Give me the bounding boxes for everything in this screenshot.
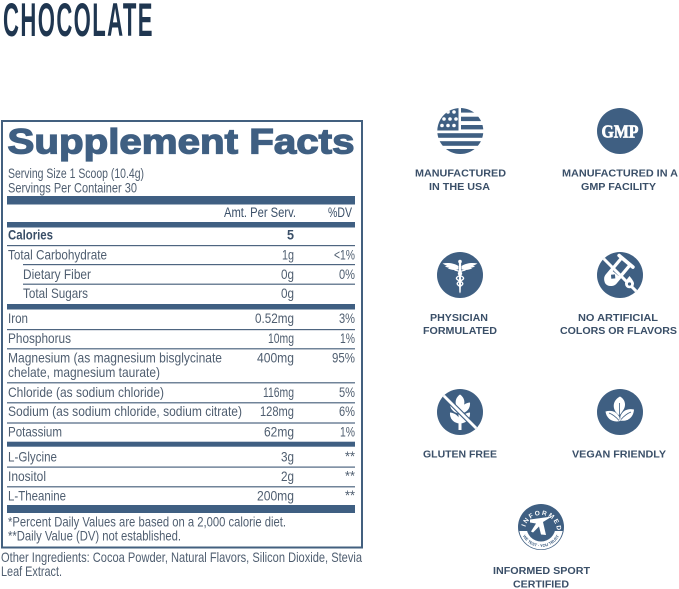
other ingredients: Other Ingredients: Cocoa Powder, Natural Flavors, Silicon Dioxide, Stevia	[1, 549, 362, 565]
row: potassium: 1%	[340, 424, 355, 440]
row: l-glycine	[8, 448, 355, 465]
row: phosphorus: 10mg	[268, 330, 294, 346]
column headers	[224, 205, 352, 220]
row: l-glycine: **	[345, 448, 355, 464]
badge: physician formulated	[423, 252, 497, 337]
footnotes: **Daily Value (DV) not established.	[8, 528, 181, 544]
label: INFORMED SPORT	[493, 565, 591, 577]
label	[415, 168, 506, 193]
row: total carbohydrate: <1%	[334, 246, 355, 262]
label: COLORS OR FLAVORS	[560, 325, 677, 337]
icon: american flag	[437, 108, 485, 154]
row: potassium: 62mg	[264, 424, 294, 440]
badge: gmp facility	[562, 108, 678, 193]
row: l-theanine	[8, 487, 355, 504]
serving information: Serving Size 1 Scoop (10.4g)	[8, 165, 144, 181]
icon: crossed test tube	[597, 252, 643, 298]
row: l-glycine: L-Glycine	[8, 449, 57, 465]
row: magnesium: Magnesium (as magnesium bisglycinate	[8, 350, 222, 366]
badge: manufactured in the usa	[415, 108, 506, 193]
label: PHYSICIAN	[430, 312, 488, 324]
row: total carbohydrate	[8, 246, 355, 262]
label: GMP FACILITY	[581, 181, 656, 193]
row: chloride: Chloride (as sodium chloride)	[8, 384, 164, 400]
row: l-theanine: L-Theanine	[8, 488, 66, 504]
divider bar	[7, 196, 355, 204]
row: phosphorus: Phosphorus	[8, 330, 71, 346]
row: inositol: Inositol	[8, 468, 46, 484]
divider bar	[7, 442, 355, 447]
row: inositol: 2g	[281, 468, 294, 484]
row: dietary fiber: Dietary Fiber	[23, 266, 91, 282]
row: l-theanine: **	[345, 487, 355, 503]
row: sodium: 6%	[339, 403, 355, 419]
row: iron	[8, 310, 355, 326]
other ingredients: Leaf Extract.	[1, 563, 62, 579]
label	[493, 565, 591, 589]
row: iron: 3%	[339, 310, 355, 326]
label: MANUFACTURED	[415, 168, 506, 180]
label: NO ARTIFICIAL	[578, 312, 659, 324]
label: VEGAN FRIENDLY	[572, 449, 666, 461]
serving information: Servings Per Container 30	[8, 180, 137, 196]
row: total carbohydrate: 1g	[282, 246, 294, 262]
icon: gmp: GMP	[602, 122, 638, 142]
row: iron: Iron	[8, 310, 28, 326]
label: IN THE USA	[429, 181, 490, 193]
row: dietary fiber: 0g	[281, 266, 294, 282]
column headers: %DV	[328, 205, 352, 220]
label	[562, 168, 678, 193]
badge: vegan friendly	[572, 389, 666, 461]
label: GLUTEN FREE	[423, 449, 497, 461]
row: chloride: 5%	[339, 384, 355, 400]
row: phosphorus	[8, 330, 355, 346]
footnotes	[8, 514, 286, 544]
row: magnesium	[8, 350, 355, 380]
row: l-theanine: 200mg	[257, 488, 294, 504]
other ingredients	[1, 549, 362, 579]
row: inositol	[8, 468, 355, 484]
row: chloride: 116mg	[263, 384, 294, 400]
column headers: Amt. Per Serv.	[224, 205, 296, 220]
row: magnesium: chelate, magnesium taurate)	[8, 364, 160, 380]
serving information	[8, 165, 144, 196]
badge: informed sport certified	[493, 504, 591, 589]
divider bar	[7, 505, 355, 513]
icon: informed seal	[518, 504, 564, 550]
row: sodium: Sodium (as sodium chloride, sodium citrate)	[8, 403, 242, 419]
label	[560, 312, 677, 337]
row: iron: 0.52mg	[255, 310, 294, 326]
icon: crossed wheat	[437, 389, 483, 435]
row: dietary fiber	[23, 266, 355, 282]
row: l-glycine: 3g	[281, 449, 294, 465]
icon: informed seal: WE TEST · YOU TRUST	[523, 534, 559, 547]
row: calories: 5	[287, 228, 294, 242]
row: total sugars: Total Sugars	[23, 285, 88, 301]
divider bar	[7, 304, 355, 310]
row: calories	[8, 228, 294, 242]
row: magnesium: 400mg	[257, 350, 294, 366]
footnotes: *Percent Daily Values are based on a 2,000 calorie diet.	[8, 514, 286, 530]
row: total carbohydrate: Total Carbohydrate	[8, 246, 107, 262]
row: total sugars: 0g	[281, 285, 294, 301]
icon: caduceus	[437, 252, 483, 298]
label: MANUFACTURED IN A	[562, 168, 678, 180]
label	[423, 312, 497, 337]
row: potassium: Potassium	[8, 424, 62, 440]
label: FORMULATED	[423, 325, 497, 337]
row: calories: Calories	[8, 228, 53, 242]
icon: leaves	[597, 389, 643, 435]
icon: informed seal: INFORMED	[521, 510, 562, 530]
divider bar	[7, 222, 355, 228]
badge: gluten free	[423, 389, 497, 461]
row: total sugars	[23, 285, 294, 301]
panel: supplement facts	[2, 121, 362, 548]
row: sodium: 128mg	[260, 403, 294, 419]
row: phosphorus: 1%	[340, 330, 355, 346]
heading: Supplement Facts	[8, 122, 354, 162]
row: dietary fiber: 0%	[339, 266, 355, 282]
row: chloride	[8, 384, 355, 400]
badge: no artificial colors or flavors	[560, 252, 677, 337]
row: magnesium: 95%	[332, 350, 355, 366]
row: inositol: **	[345, 468, 355, 484]
row: potassium	[8, 424, 355, 440]
